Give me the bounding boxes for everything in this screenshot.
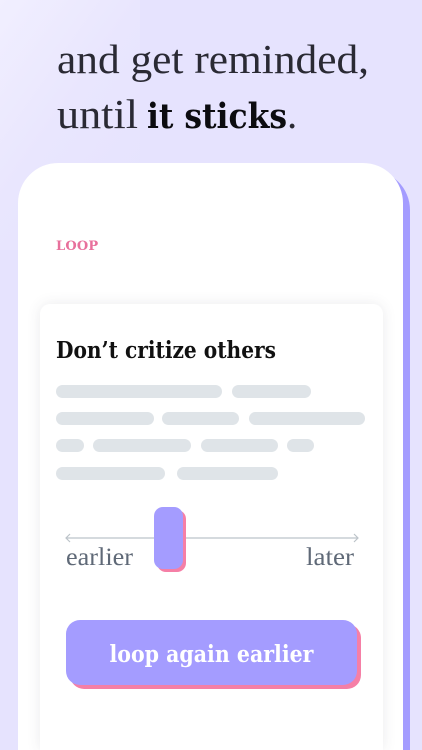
card title: Don’t critize others <box>56 337 276 364</box>
slider labels: earlier <box>66 544 134 571</box>
slider <box>65 507 359 572</box>
LOOP label: LOOP <box>56 239 98 254</box>
headline: until <box>57 91 138 137</box>
background tint <box>0 0 140 250</box>
slider labels <box>66 544 355 571</box>
slider track arrow <box>66 534 358 542</box>
headline: it sticks <box>147 96 287 137</box>
inner card <box>40 304 383 750</box>
button <box>66 620 357 685</box>
main card shadow <box>30 170 410 750</box>
text placeholder bars <box>56 385 365 480</box>
button label: loop again earlier <box>110 641 314 668</box>
headline: . <box>287 91 297 137</box>
headline: and get reminded, <box>57 36 369 82</box>
slider thumb <box>154 507 186 572</box>
slider labels: later <box>306 544 355 571</box>
headline <box>57 36 369 137</box>
main card <box>18 163 403 750</box>
